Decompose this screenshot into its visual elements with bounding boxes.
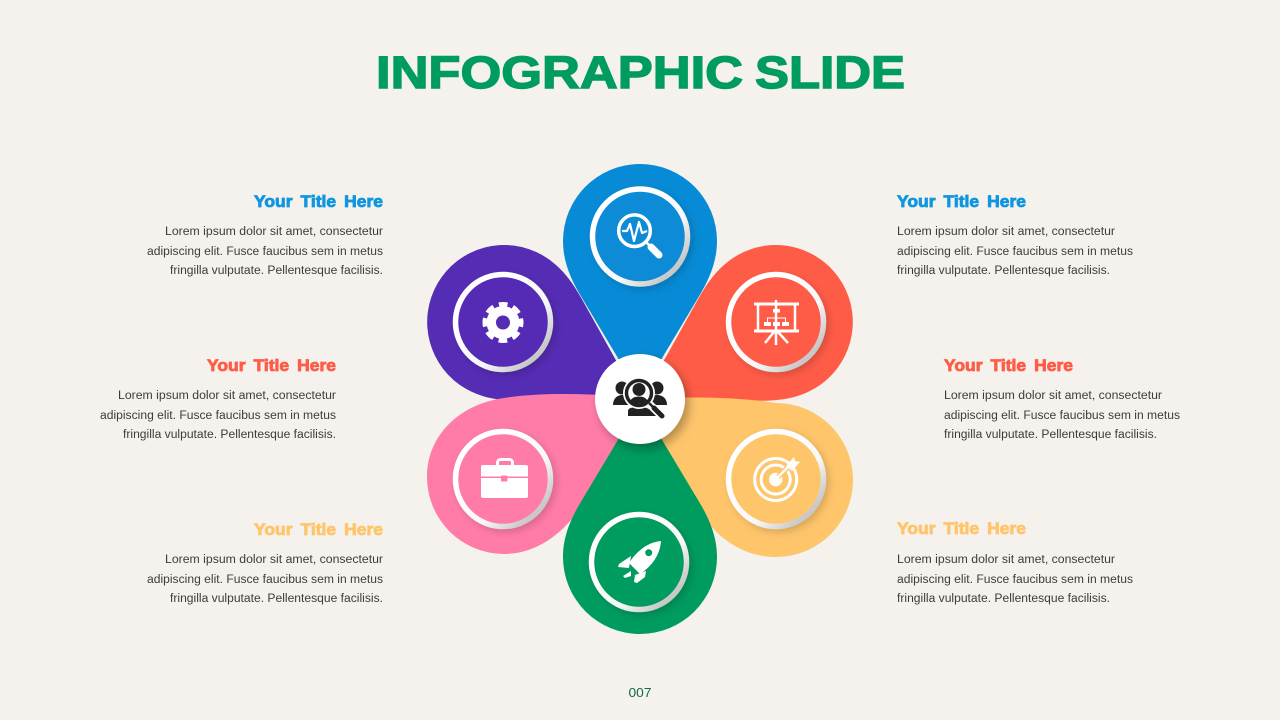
petal: orange [604, 217, 881, 466]
icon: gear [485, 304, 521, 340]
petal: purple [399, 217, 676, 466]
text block: top left: Lorem ipsum dolor sit amet, consectetur [165, 226, 383, 238]
ring: blue [592, 189, 688, 284]
text block: bottom left: adipiscing elit. Fusce faucibus sem in metus [147, 574, 383, 586]
title [376, 47, 905, 98]
icon: briefcase [481, 460, 528, 498]
text block: middle left: Your Title Here [207, 357, 336, 375]
center circle [595, 354, 685, 444]
ring: purple [456, 274, 550, 370]
text block: middle left: fringilla vulputate. Pellentesque facilisis. [123, 429, 336, 441]
page number: 007 [628, 685, 652, 700]
text block: bottom left [147, 521, 383, 605]
text block: bottom right: Lorem ipsum dolor sit amet, consectetur [897, 554, 1115, 566]
petal: green [563, 403, 717, 634]
text block: middle right: fringilla vulputate. Pellentesque facilisis. [944, 429, 1157, 441]
text block: bottom right: fringilla vulputate. Pellentesque facilisis. [897, 593, 1110, 605]
text block: bottom right: adipiscing elit. Fusce faucibus sem in metus [897, 574, 1133, 586]
text block: middle left [100, 357, 336, 441]
text block: middle right: Your Title Here [944, 357, 1073, 375]
ring: green [592, 514, 686, 610]
text block: bottom right [897, 520, 1133, 605]
text block: top right [897, 193, 1133, 277]
text block: middle left: adipiscing elit. Fusce faucibus sem in metus [100, 410, 336, 422]
text block: middle right [944, 357, 1180, 441]
title: INFOGRAPHIC [376, 47, 743, 98]
text block: top right: adipiscing elit. Fusce faucibus sem in metus [897, 246, 1133, 258]
petal: yellow [640, 396, 853, 557]
ring: pink [456, 432, 550, 526]
icon: people search [613, 377, 667, 416]
text block: middle right: adipiscing elit. Fusce faucibus sem in metus [944, 410, 1180, 422]
ring: orange [728, 274, 824, 370]
text block: top right: Lorem ipsum dolor sit amet, consectetur [897, 226, 1115, 238]
text block: bottom left: fringilla vulputate. Pellentesque facilisis. [170, 593, 383, 605]
text block: middle left: Lorem ipsum dolor sit amet, consectetur [118, 390, 336, 402]
text block: bottom left: Lorem ipsum dolor sit amet, consectetur [165, 554, 383, 566]
text block: top left: adipiscing elit. Fusce faucibus sem in metus [147, 246, 383, 258]
text block: top right: fringilla vulputate. Pellentesque facilisis. [897, 265, 1110, 277]
icon: rocket [618, 541, 661, 583]
petal: pink [427, 394, 640, 554]
text block: middle right: Lorem ipsum dolor sit amet, consectetur [944, 390, 1162, 402]
title: SLIDE [755, 47, 905, 98]
icon: magnifier with pulse [619, 215, 659, 255]
icon: presentation board [754, 300, 799, 345]
petal: blue [563, 164, 717, 395]
text block: top left: Your Title Here [254, 193, 383, 211]
text block: bottom right: Your Title Here [897, 520, 1026, 538]
text block: top left [147, 193, 383, 277]
text block: top right: Your Title Here [897, 193, 1026, 211]
text block: bottom left: Your Title Here [254, 521, 383, 539]
icon: target [755, 457, 800, 500]
text block: top left: fringilla vulputate. Pellentesque facilisis. [170, 265, 383, 277]
ring: yellow [728, 432, 824, 526]
